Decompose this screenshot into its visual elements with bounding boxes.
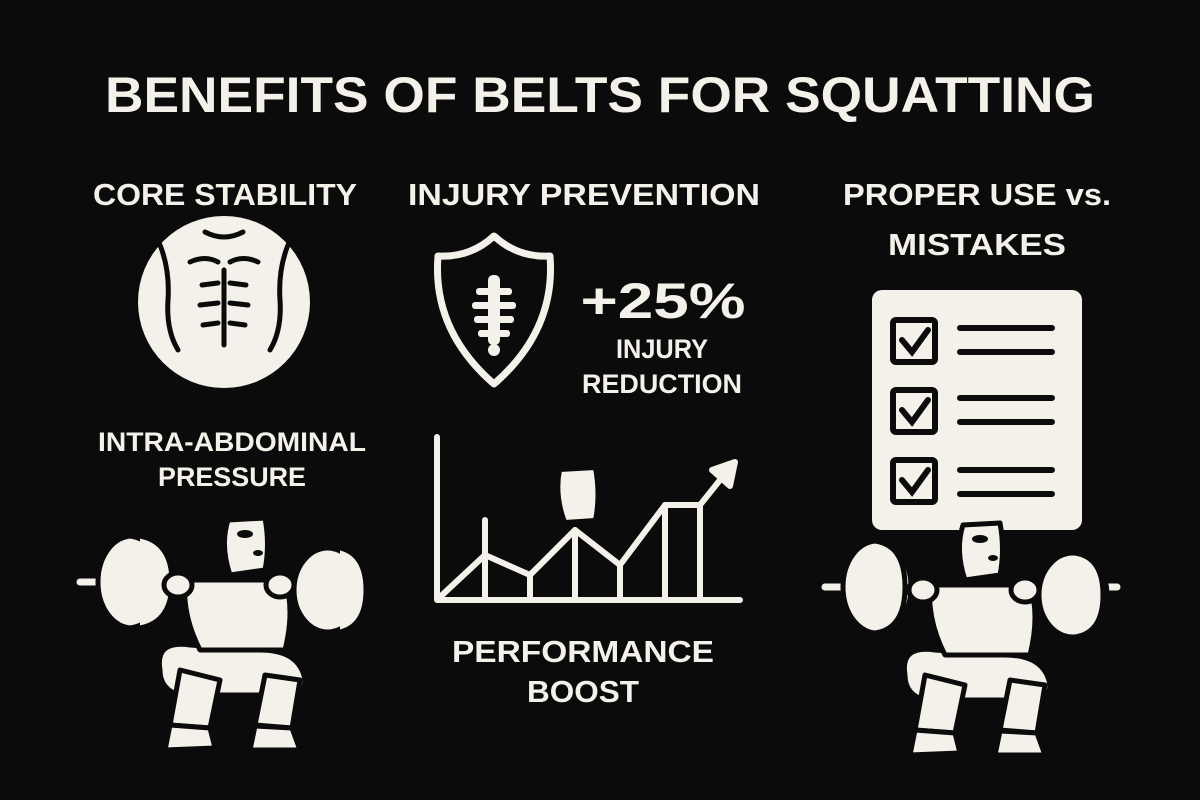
- panel: proper use vs mistakes: MISTAKES: [888, 227, 1066, 262]
- panel: core stability: [93, 177, 366, 492]
- title: BENEFITS OF BELTS FOR SQUATTING: [105, 67, 1095, 123]
- chart: performance growth: [437, 437, 740, 600]
- text: intra-abdominal pressure: INTRA-ABDOMINAL: [98, 427, 366, 457]
- icon: squatting lifter right: [819, 523, 1123, 755]
- stat: +25% injury reduction: REDUCTION: [582, 369, 742, 399]
- stat: +25% injury reduction: INJURY: [616, 334, 708, 364]
- text: performance boost: PERFORMANCE: [452, 634, 714, 669]
- panel: proper use vs mistakes: [843, 177, 1111, 530]
- icon: checklist clipboard: [872, 290, 1082, 530]
- heading: injury prevention: INJURY PREVENTION: [408, 177, 760, 212]
- icon: shield with spine: [437, 236, 551, 384]
- panel: core stability: PRESSURE: [158, 462, 306, 492]
- stat: +25% injury reduction: +25%: [580, 273, 746, 329]
- panel: injury prevention: [408, 177, 760, 709]
- icon: abdominal circle: [138, 216, 310, 388]
- heading: proper use vs mistakes: PROPER USE vs.: [843, 177, 1111, 212]
- panel: injury prevention: BOOST: [527, 674, 639, 709]
- stat: +25% injury reduction: [580, 273, 746, 399]
- heading: core stability: CORE STABILITY: [93, 177, 357, 212]
- icon: squatting lifter left: [74, 518, 366, 750]
